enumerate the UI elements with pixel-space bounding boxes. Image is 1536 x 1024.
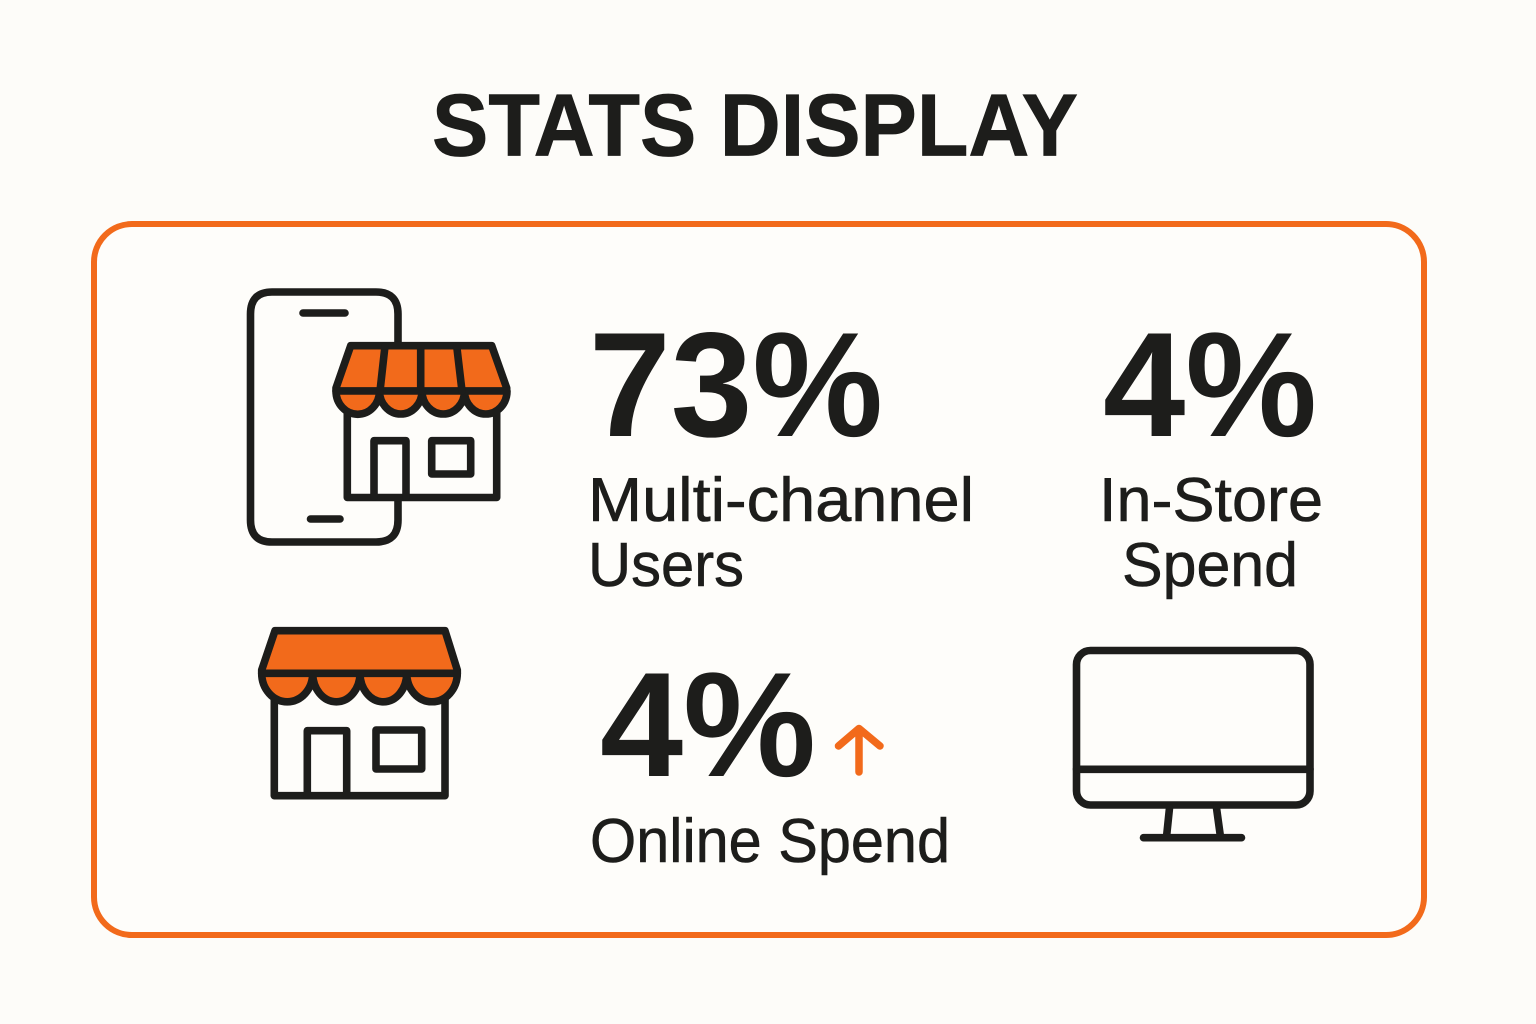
stat: 4% online spend: 4% (600, 641, 816, 808)
stat: 73% multi-channel users: Multi-channel (588, 466, 974, 535)
stat: 73% multi-channel users (588, 301, 974, 600)
stat: 4% online spend (590, 641, 950, 876)
stat: 4% in-store spend (1099, 301, 1323, 600)
stat: 4% in-store spend: Spend (1122, 531, 1298, 600)
icon: desktop monitor (1076, 650, 1310, 838)
arrow: up (838, 728, 880, 772)
stat: 4% in-store spend: 4% (1103, 301, 1317, 468)
title: STATS DISPLAY (432, 76, 1078, 174)
stat: 4% online spend: Online Spend (590, 807, 950, 876)
stat: 73% multi-channel users: 73% (589, 301, 883, 468)
stat: 4% in-store spend: In-Store (1099, 466, 1323, 535)
stat: 73% multi-channel users: Users (588, 531, 744, 600)
icon: store (262, 631, 457, 796)
panel: stats frame (94, 224, 1424, 935)
icon: phone and store (250, 292, 507, 542)
